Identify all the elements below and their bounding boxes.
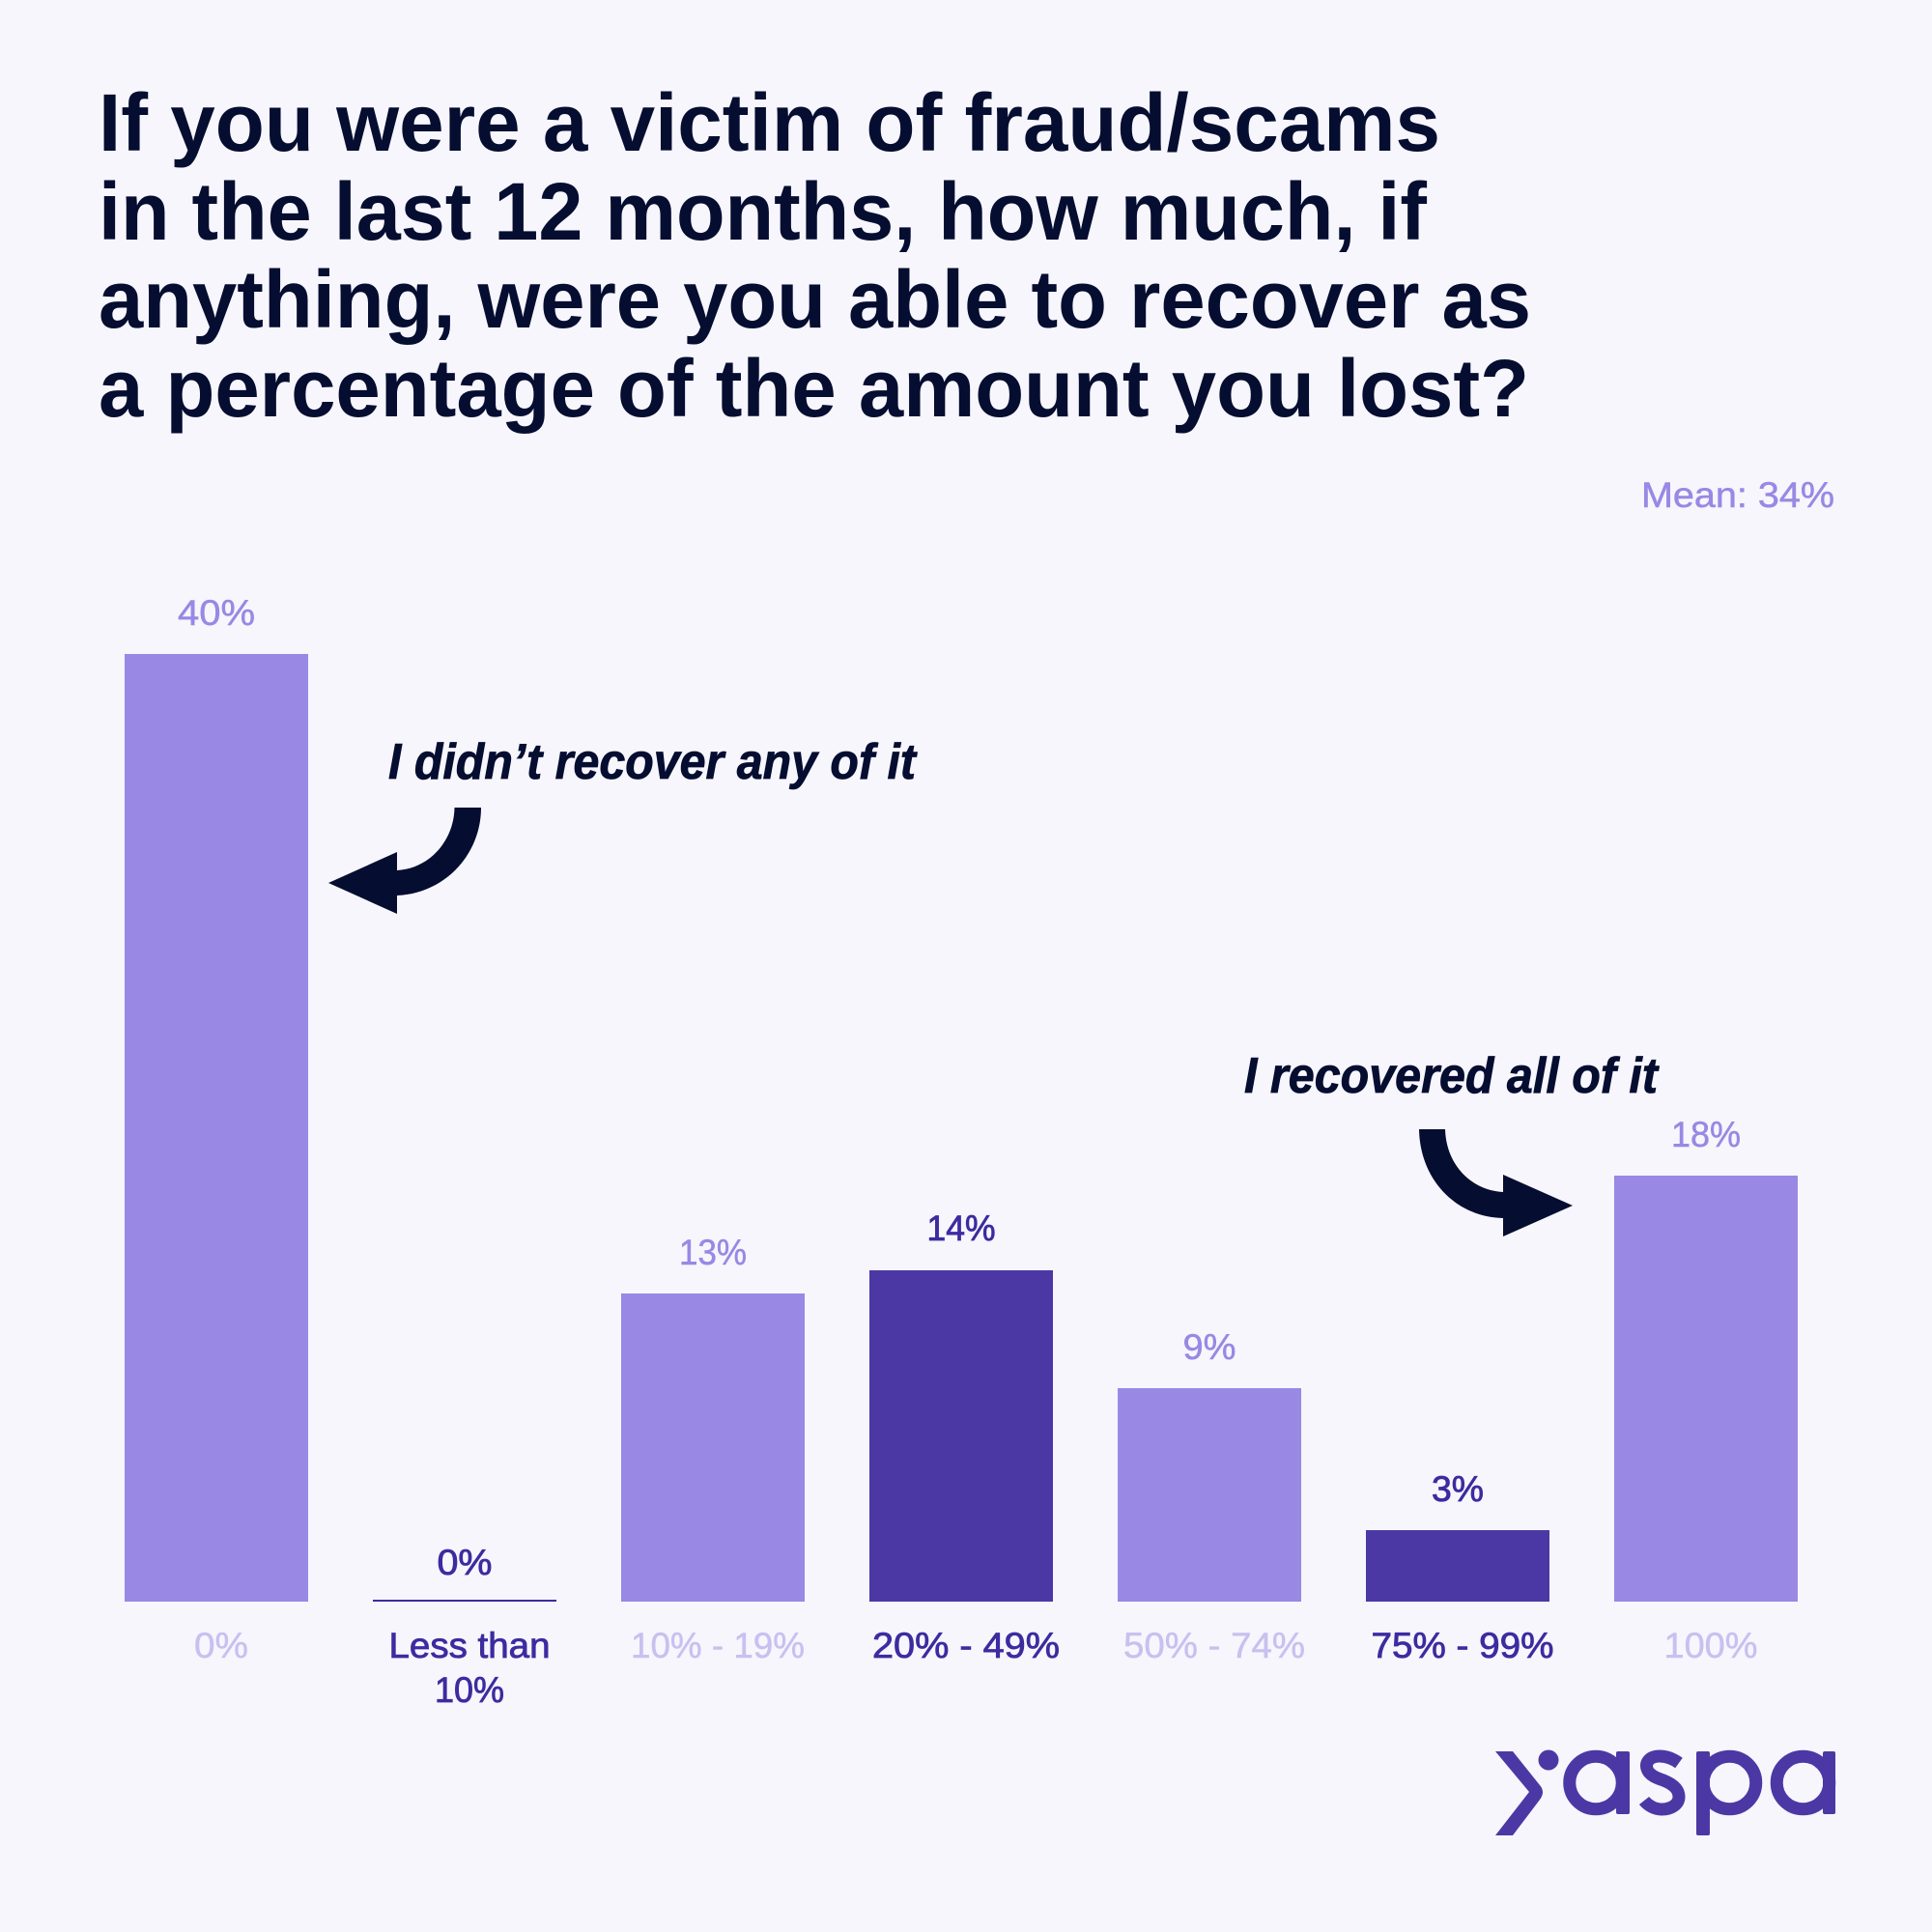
bar: less than 10% xyxy=(373,1543,556,1710)
bar: 10% - 19%: 10% - 19% xyxy=(631,1626,805,1665)
title: in the last 12 months, how much, if xyxy=(99,166,1428,257)
bar: 10% - 19% xyxy=(621,1233,805,1665)
bar: 75% - 99% xyxy=(1366,1469,1553,1665)
bar: 0%: 40% xyxy=(178,593,255,633)
mean label: Mean: 34% xyxy=(1641,475,1834,515)
title: If you were a victim of fraud/scams xyxy=(99,77,1440,168)
bar: 100%: 100% xyxy=(1663,1626,1758,1665)
bar: 0% xyxy=(125,593,308,1665)
bar: 75% - 99%: 3% xyxy=(1432,1469,1484,1509)
title: a percentage of the amount you lost? xyxy=(99,343,1529,434)
bar: 50% - 74% xyxy=(1118,1327,1305,1665)
bar: 50% - 74%: 50% - 74% xyxy=(1123,1626,1305,1665)
bar: less than 10%: Less than xyxy=(388,1626,551,1665)
arrow: pointing to 0% bar xyxy=(328,808,481,914)
bar: 100%: 18% xyxy=(1671,1115,1741,1154)
title xyxy=(99,77,1531,434)
arrow: pointing to 100% bar xyxy=(1419,1129,1573,1236)
callout: recovered all: I recovered all of it xyxy=(1244,1048,1660,1104)
bar: 20% - 49%: 20% - 49% xyxy=(872,1626,1060,1665)
bar: 20% - 49%: 14% xyxy=(927,1208,995,1248)
bar: 20% - 49% xyxy=(869,1208,1060,1665)
bar: 100% xyxy=(1614,1115,1798,1665)
bar: 0%: 0% xyxy=(194,1626,248,1665)
logo: yaspa xyxy=(1495,1750,1835,1835)
bar: 50% - 74%: 9% xyxy=(1182,1327,1236,1367)
callout: didn't recover any: I didn’t recover any of it xyxy=(388,734,918,790)
bar: less than 10%: 0% xyxy=(437,1543,493,1582)
bar chart xyxy=(125,593,1798,1710)
title: anything, were you able to recover as xyxy=(99,254,1531,345)
bar: less than 10%: 10% xyxy=(435,1670,504,1710)
bar: 75% - 99%: 75% - 99% xyxy=(1372,1626,1553,1665)
bar: 10% - 19%: 13% xyxy=(679,1233,747,1272)
